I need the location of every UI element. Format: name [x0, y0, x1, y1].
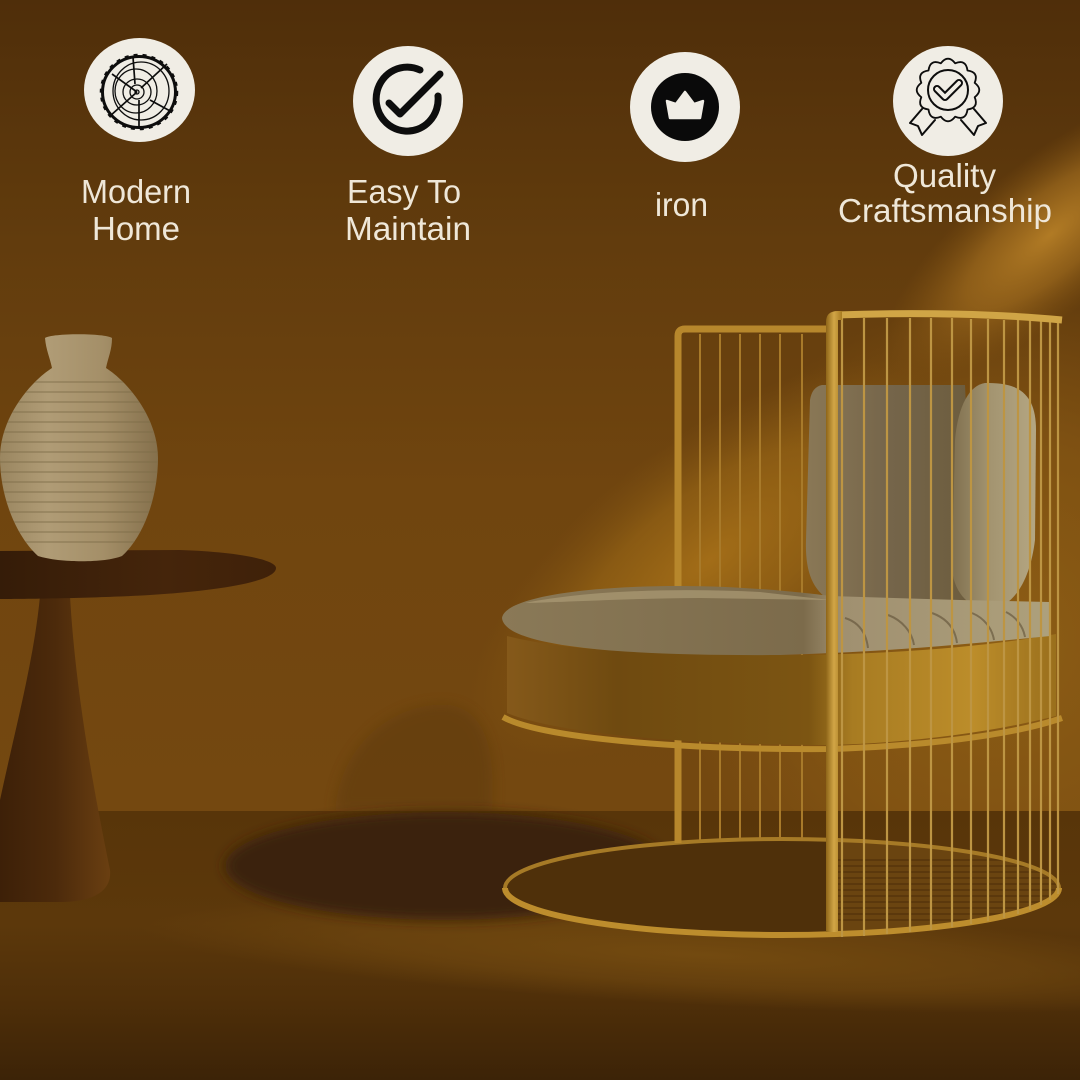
side table	[0, 550, 276, 902]
feature: Quality Craftsmanship	[838, 46, 1052, 229]
base ring back arc	[505, 839, 1059, 888]
seat highlight	[525, 590, 830, 603]
icon: crown	[630, 52, 740, 162]
feature: iron	[630, 52, 740, 223]
label: Modern Home	[81, 173, 191, 247]
table top	[0, 550, 276, 599]
vase	[0, 334, 160, 561]
seat cushion	[502, 586, 1050, 655]
icon: check circle	[353, 46, 463, 156]
label: Quality Craftsmanship: Craftsmanship	[838, 192, 1052, 229]
background: floor	[0, 811, 1080, 1080]
seat bar shadows	[845, 612, 1025, 648]
label: Modern Home: Home	[92, 210, 180, 247]
base ring front arc	[505, 888, 1059, 935]
back wire frame	[678, 329, 828, 843]
label: Easy To Maintain: Maintain	[345, 210, 471, 247]
background: wall	[0, 0, 1080, 811]
front vertical bars	[842, 318, 1058, 937]
floor shadow of chair	[225, 812, 665, 920]
feature: Easy To Maintain	[345, 46, 471, 247]
label: Easy To Maintain: Easy To	[347, 173, 461, 210]
icon: rosette badge	[893, 46, 1003, 156]
label: iron: iron	[655, 186, 708, 223]
feature: Modern Home	[81, 38, 195, 247]
chair	[502, 311, 1070, 945]
label: Quality Craftsmanship	[838, 157, 1052, 229]
label: Quality Craftsmanship: Quality	[893, 157, 996, 194]
base ring floor	[507, 841, 1057, 932]
label: Modern Home: Modern	[81, 173, 191, 210]
label: Easy To Maintain	[345, 173, 471, 247]
icon: tree rings	[84, 38, 195, 142]
back cushion	[806, 385, 975, 600]
side cushion	[952, 383, 1036, 611]
top front rail	[836, 314, 1062, 320]
mid ring	[503, 717, 1062, 749]
front post	[826, 311, 842, 932]
table leg	[0, 596, 110, 902]
seat drum	[507, 634, 1056, 745]
wall shadow of chair	[335, 705, 493, 811]
